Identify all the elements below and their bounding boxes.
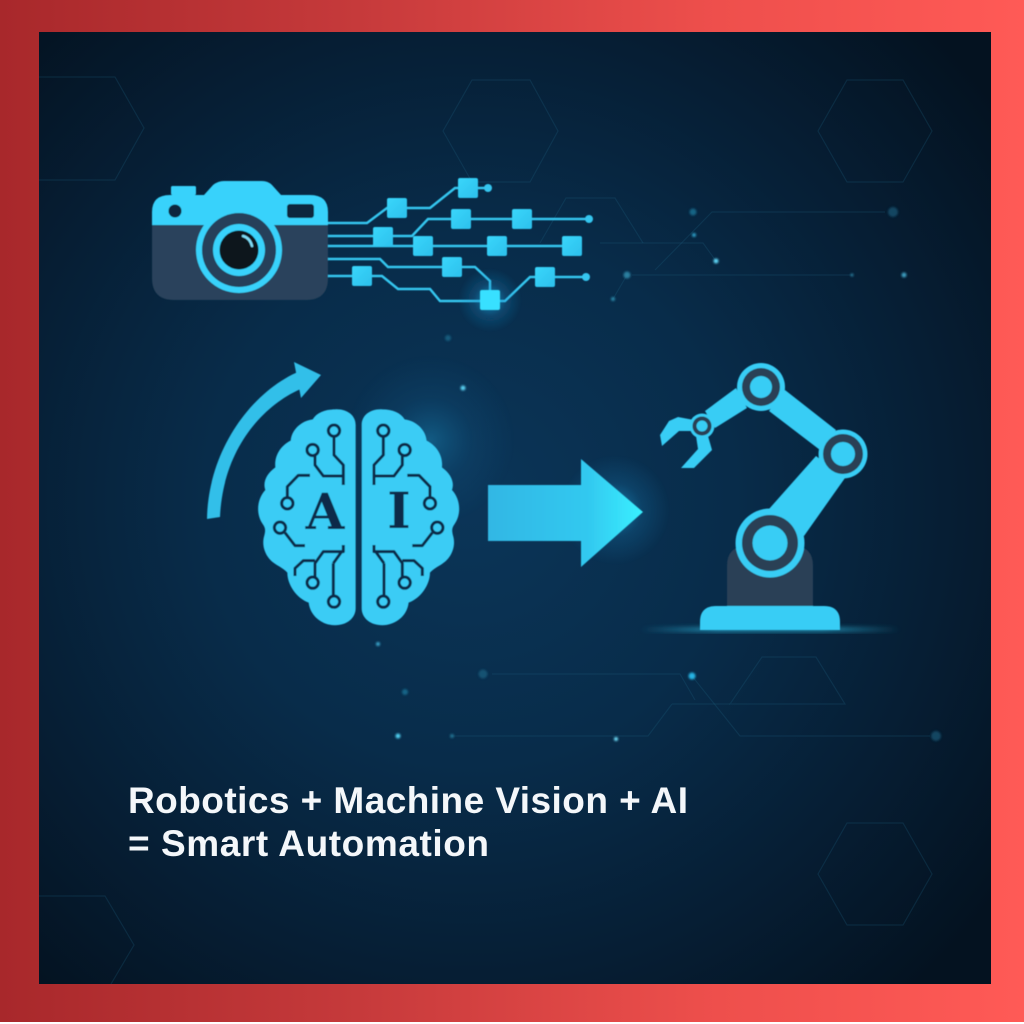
title: = Smart Automation (128, 823, 489, 864)
circuit end points (484, 184, 593, 281)
floor glow (640, 627, 900, 632)
arrow: curved loop arrow (207, 362, 321, 519)
brain letter A: A (305, 482, 346, 541)
background circuit and hexagon pattern (39, 77, 941, 984)
circuit node glow (458, 268, 522, 332)
circuit nodes (352, 178, 582, 310)
glow behind brain (345, 355, 515, 525)
icon: AI brain (258, 409, 459, 625)
base plate (700, 606, 840, 630)
joints (690, 363, 868, 578)
icon: robot arm (640, 363, 900, 632)
arrow: brain to robot (488, 459, 643, 567)
arm segments (660, 388, 845, 536)
title (128, 780, 688, 864)
glow at arrow tip (560, 455, 670, 565)
brain letter I: I (387, 481, 411, 540)
circuit traces (328, 188, 589, 301)
icon: camera with circuit traces (152, 178, 593, 332)
camera body (152, 181, 328, 300)
pedestal (727, 546, 813, 606)
title: Robotics + Machine Vision + AI (128, 780, 688, 821)
